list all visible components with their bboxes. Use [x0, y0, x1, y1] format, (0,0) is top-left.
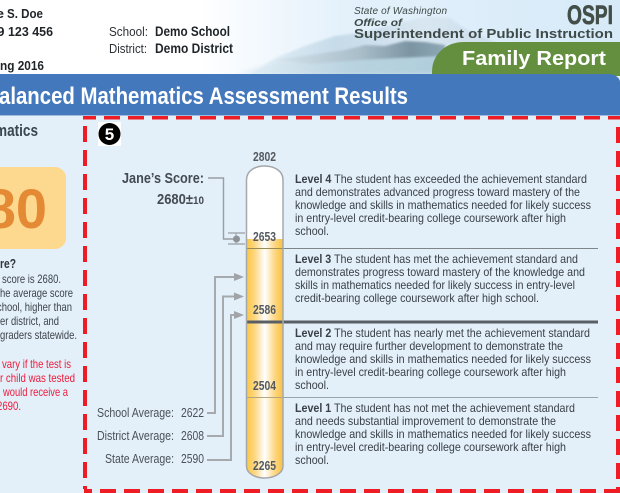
scale values: 2653: [253, 229, 276, 244]
test date: ng 2016: [0, 58, 44, 73]
level 3 description: demonstrates progress toward mastery of the knowledge and: [295, 265, 585, 279]
average score labels: District Average:: [97, 429, 174, 443]
level 2 description: and may require further development to demonstrate the: [295, 339, 563, 353]
level 2 description: Level 2 The student has nearly met the achievement standard: [295, 326, 590, 340]
student score marker: [208, 178, 245, 244]
level 4 description: Level 4 The student has exceeded the achievement standard: [295, 172, 587, 186]
score explanation: graders statewide.: [0, 328, 77, 342]
arrowheads: [234, 273, 244, 319]
score explanation: he average score: [0, 286, 73, 300]
header background: [0, 0, 620, 75]
agency name: [354, 6, 613, 41]
score box: [0, 167, 66, 249]
mountain illustration: [235, 17, 540, 75]
student score label: [122, 171, 204, 208]
score explanation: [0, 257, 77, 342]
level 1 description: in entry-level credit-bearing college coursework after high: [295, 440, 566, 454]
level 3 description: [295, 252, 585, 305]
level 1 description: and needs substantial improvement to demonstrate the: [295, 414, 556, 428]
student score label: 2680±: [157, 192, 193, 208]
student id: 123 456: [8, 24, 53, 39]
level 1 description: school.: [295, 453, 329, 467]
school info: Demo District: [155, 41, 233, 56]
scale values: 2265: [253, 458, 276, 473]
family report tab: Family Report: [462, 47, 606, 70]
level 4 description: [295, 172, 591, 238]
level 1 description: knowledge and skills in mathematics needed for likely success: [295, 427, 591, 441]
average score labels: School Average:: [97, 406, 174, 420]
scale values: [253, 149, 277, 473]
title banner: [0, 74, 620, 116]
level 4 description: in entry-level credit-bearing college coursework after high: [295, 211, 566, 225]
school info: District:: [109, 41, 147, 56]
level 3 description: skills in mathematics needed for likely success in entry-level: [295, 278, 575, 292]
school info: School:: [109, 24, 148, 39]
score thermometer: [246, 166, 283, 479]
agency name: State of Washington: [354, 6, 447, 17]
agency name: Office of: [354, 18, 404, 29]
title banner: alanced Mathematics Assessment Results: [0, 83, 408, 110]
scale values: 2802: [253, 149, 276, 164]
average score labels: [97, 406, 204, 466]
school info: [109, 24, 233, 56]
dashed highlight border: [83, 102, 620, 493]
level divider lines: [246, 248, 598, 398]
level 1 description: [295, 401, 591, 467]
school info: Demo School: [155, 24, 230, 39]
step number 5 badge: [98, 122, 121, 146]
level 3 description: Level 3 The student has met the achievement standard and: [295, 252, 578, 266]
level 1 description: Level 1 The student has not met the achievement standard: [295, 401, 575, 415]
level 2 description: school.: [295, 378, 329, 392]
score explanation: er district, and: [0, 314, 59, 328]
step number 5 badge: 5: [105, 125, 114, 144]
average score labels: 2608: [181, 429, 204, 443]
level 2 description: [295, 326, 591, 392]
scale values: 2586: [253, 302, 276, 317]
student score label: Jane’s Score:: [122, 171, 204, 187]
level 4 description: and demonstrates advanced progress toward mastery of the: [295, 185, 580, 199]
level 3 description: credit-bearing college coursework after high school.: [295, 291, 539, 305]
score explanation: score is 2680.: [2, 272, 61, 286]
score variability note: would receive a: [2, 385, 68, 399]
agency name: Superintendent of Public Instruction: [354, 27, 613, 41]
score variability note: [0, 357, 75, 413]
level 4 description: knowledge and skills in mathematics needed for likely success: [295, 198, 591, 212]
average score arrows: [207, 277, 235, 460]
average score labels: 2590: [181, 452, 204, 466]
average score labels: State Average:: [105, 452, 174, 466]
scale values: 2504: [253, 378, 277, 393]
level 2 description: knowledge and skills in mathematics needed for likely success: [295, 352, 591, 366]
level 4 description: school.: [295, 224, 329, 238]
score variability note: vary if the test is: [2, 357, 71, 371]
score explanation: re?: [0, 257, 16, 271]
student score label: 10: [193, 195, 204, 207]
score variability note: r child was tested: [0, 371, 75, 385]
student name: S. Doe: [7, 6, 43, 21]
family report tab: [432, 42, 620, 76]
average score labels: 2622: [181, 406, 204, 420]
level 2 description: in entry-level credit-bearing college coursework after high: [295, 365, 566, 379]
